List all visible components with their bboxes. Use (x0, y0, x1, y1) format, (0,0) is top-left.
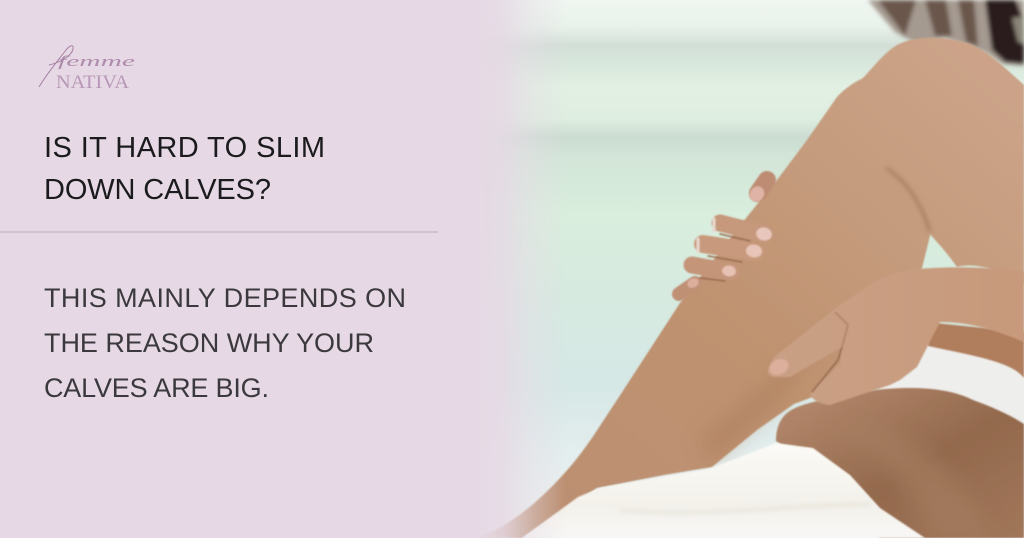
body text: CALVES ARE BIG. (44, 373, 269, 403)
finger shadows (700, 234, 750, 281)
logo wordmark: NATIVA (56, 72, 129, 93)
finger: third (703, 244, 755, 252)
photo: arm and hand on calf (767, 267, 1024, 405)
finger: top (758, 180, 767, 193)
divider (0, 232, 438, 233)
photo: fingernails (686, 184, 773, 290)
photo: knee crease (886, 168, 930, 232)
photo: shin and calf (478, 78, 931, 538)
photo: gripping fingers (679, 180, 767, 294)
heading: DOWN CALVES? (44, 174, 271, 206)
logo: Femme Nativa (39, 46, 136, 93)
heading (44, 132, 325, 206)
finger: little (679, 283, 695, 294)
thumb nail (767, 356, 791, 378)
photo: shadow on shin (700, 330, 830, 462)
finger: second (720, 223, 764, 234)
logo script: femme (58, 54, 136, 70)
photo: hair (868, 0, 1024, 66)
body text: THE REASON WHY YOUR (44, 328, 374, 358)
body text: THIS MAINLY DEPENDS ON (44, 283, 406, 313)
panel: left fade into photo (0, 0, 566, 538)
photo: lower bent leg (776, 388, 1024, 538)
finger: fourth (692, 265, 731, 272)
body text (44, 283, 406, 403)
photo: white sheet (522, 443, 925, 538)
photo: thigh and knee (863, 38, 1024, 284)
finger pale knuckles (698, 219, 714, 252)
heading: IS IT HARD TO SLIM (44, 132, 325, 164)
panel: photo background (440, 0, 1024, 538)
logo flourish (39, 46, 73, 87)
photo: forearm behind thigh (925, 322, 1024, 378)
